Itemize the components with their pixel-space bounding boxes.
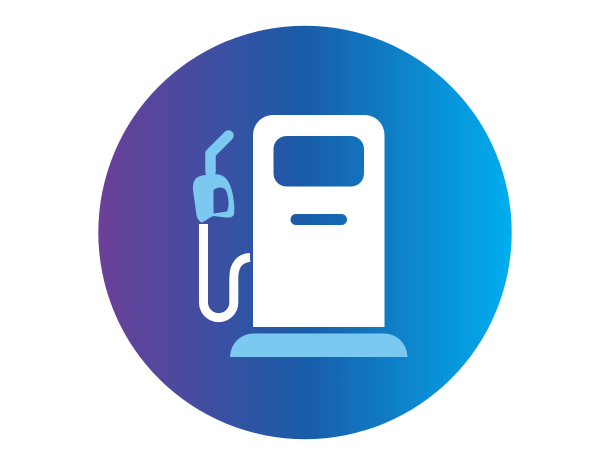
panel: gradient circle background <box>98 26 512 439</box>
icon: pump base <box>230 334 408 357</box>
icon: fuel pump body <box>253 115 384 327</box>
icon: hose <box>204 224 250 318</box>
icon: fuel nozzle <box>193 136 234 222</box>
